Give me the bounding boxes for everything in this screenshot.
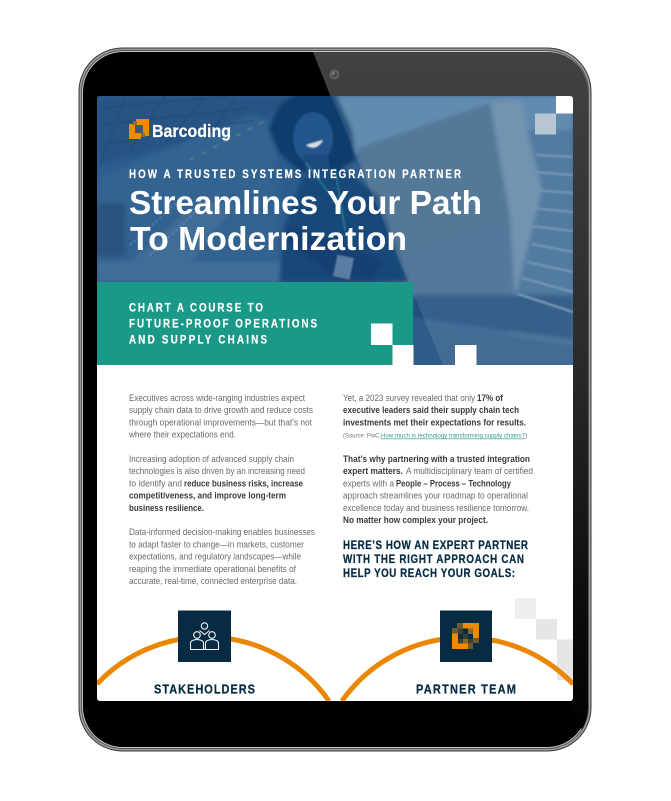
main title: To Modernization [130,221,407,258]
partner paragraph [343,453,533,525]
source citation: (Source: PwC, [343,432,381,440]
paragraph 1 [128,392,313,440]
banner pixel squares [371,324,476,365]
survey paragraph: Yet, a 2023 survey revealed that only [343,392,475,403]
paragraph 1: through operational improvements—but that’s not [129,416,312,427]
partner paragraph: approach streamlines your roadmap to operational [343,490,528,501]
partner paragraph: People – Process – Technology [396,477,512,488]
partner team icon [440,610,492,662]
decorative grey pixel squares [515,598,573,680]
survey paragraph: investments met their expectations for results. [343,416,526,427]
paragraph 3: accurate, real-time, connected enterprise data. [129,575,297,586]
paragraph 1: Executives across wide-ranging industries expect [129,392,305,403]
lanyard [306,163,345,230]
stakeholders icon [178,610,231,662]
right photo background [350,155,359,182]
woman hair [268,92,356,176]
woman body [279,170,408,282]
camera lens [330,70,340,80]
paragraph 3 [129,526,315,586]
survey paragraph: executive leaders said their supply chain tech [343,404,519,415]
partner paragraph: excellence today and business resilience tomorrow. [343,502,529,513]
main title: Streamlines Your Path [129,185,482,222]
left body text [128,392,315,586]
paragraph 3: reaping the immediate operational benefits of [129,563,296,574]
ceiling trusses [100,96,255,165]
glare over screen [331,96,573,365]
corner pixel squares [535,96,573,134]
paragraph 2: technologies is also driven by an increasing need [129,465,305,476]
rollers [510,130,573,345]
paragraph 2: Increasing adoption of advanced supply chain [129,453,294,464]
paragraph 2: competitiveness, and improve long-term [129,490,286,501]
paragraph 1: supply chain data to drive growth and reduce costs [129,404,313,415]
goals heading: HERE’S HOW AN EXPERT PARTNER [343,539,528,552]
box [358,103,512,265]
warehouse ceiling [97,96,281,160]
stakeholders arc [97,637,329,701]
partner paragraph: A multidisciplinary team of certified [406,465,533,476]
conveyor band [413,295,573,340]
logo mark [129,119,149,139]
hero photo: woman with boxes on conveyor [97,92,573,365]
survey paragraph [343,392,526,427]
right body text [343,392,533,580]
survey paragraph: 17% of [477,392,504,403]
smile [306,140,323,148]
paragraph 2: reduce business risks, increase [184,477,303,488]
woman face and neck [293,112,333,164]
goals heading: WITH THE RIGHT APPROACH CAN [343,553,524,566]
main title [130,190,480,250]
paragraph 2: business resilience. [129,502,204,513]
partner paragraph: expert matters. [343,465,403,476]
logo wordmark: Barcoding [152,121,231,141]
teal banner: AND SUPPLY CHAINS [129,334,267,347]
partner team label: PARTNER TEAM [416,683,516,697]
eyebrow heading: HOW A TRUSTED SYSTEMS INTEGRATION PARTNER [129,168,461,181]
goals heading: HELP YOU REACH YOUR GOALS: [343,567,515,580]
goals heading [343,539,528,580]
paragraph 3: to adapt faster to change—in markets, customer [129,538,304,549]
bezel glare [313,52,589,748]
stakeholders label: STAKEHOLDERS [154,683,255,697]
logo [129,119,231,141]
source citation: ) [525,432,527,440]
teal banner: CHART A COURSE TO [129,302,263,315]
paragraph 3: Data-informed decision-making enables businesses [129,526,315,537]
partner paragraph: experts with a [343,477,395,488]
id badge [333,255,354,280]
tablet frame [78,48,592,752]
paragraph 3: expectations, and regulatory landscapes—while [129,551,301,562]
screen page [97,92,573,701]
teal banner: FUTURE-PROOF OPERATIONS [129,318,317,331]
partner team arc [342,638,573,701]
paragraph 2: to identify and [129,477,182,488]
source citation: How much is technology transforming supply chains? [381,432,525,440]
partner paragraph: That’s why partnering with a trusted integration [343,453,530,464]
roller stripes [518,155,573,312]
paragraph 1: where their expectations end. [128,429,236,440]
teal banner [97,282,413,365]
partner paragraph: No matter how complex your project. [343,514,488,525]
paragraph 2 [129,453,305,513]
